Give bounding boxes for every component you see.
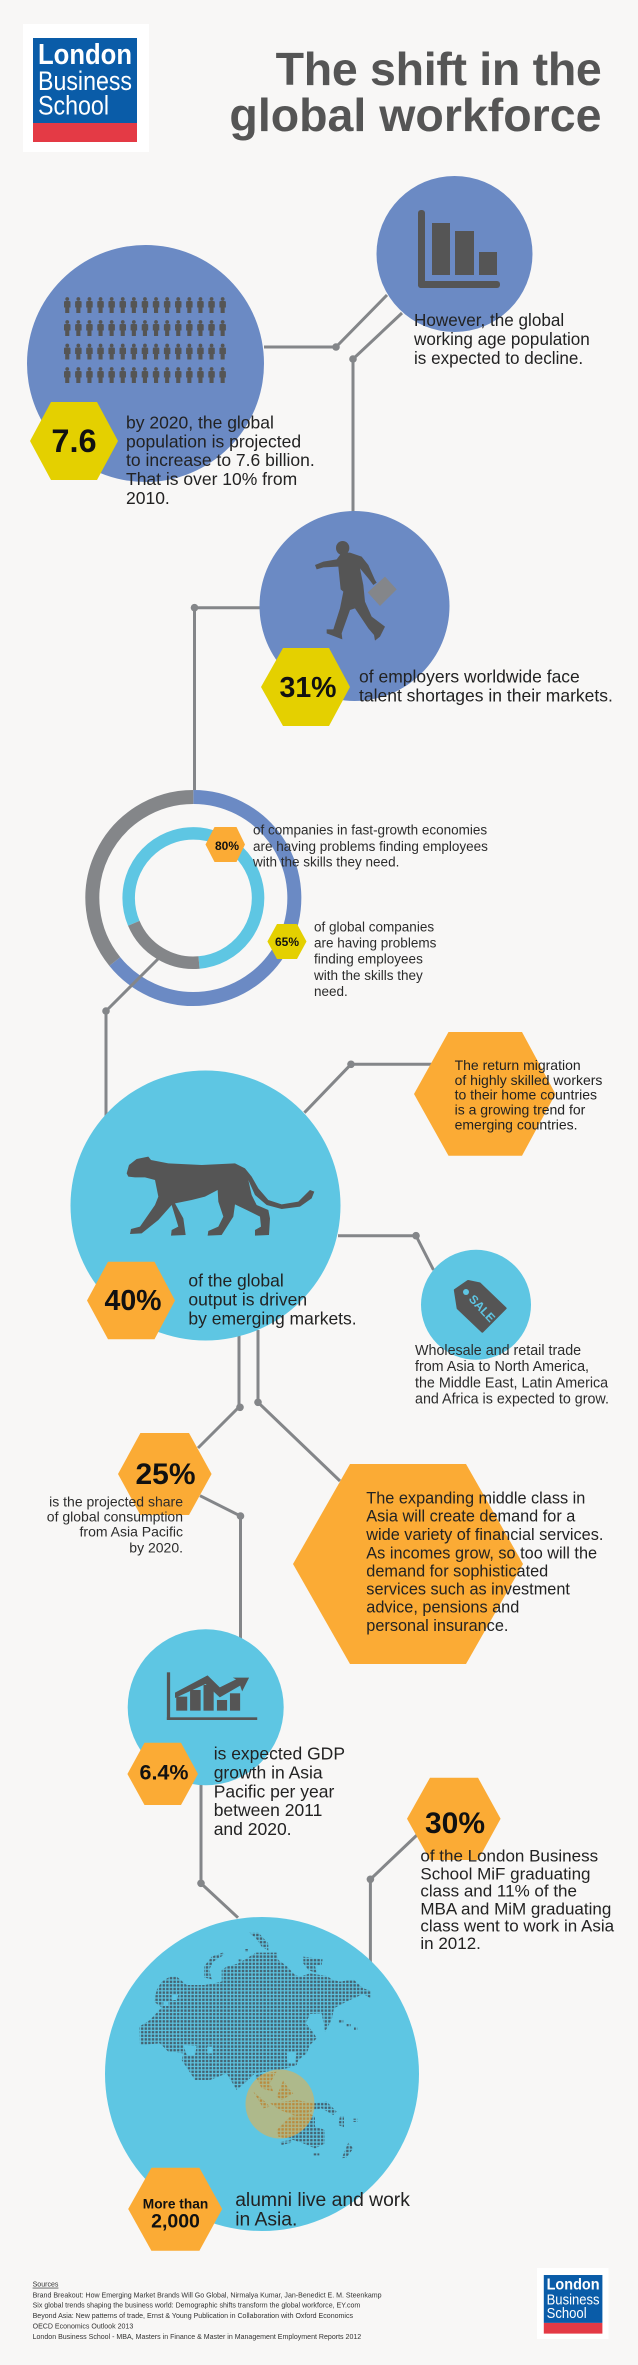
hexagon: 80%: 80% <box>215 839 239 853</box>
text: return migration: to their home countries <box>455 1086 597 1102</box>
panel: alumni in Asia map <box>105 1917 419 2251</box>
text: wholesale: and Africa is expected to grow. <box>415 1391 609 1407</box>
text: GDP: between 2011 <box>214 1800 322 1820</box>
text: global companies: with the skills they <box>313 968 423 983</box>
logo: footer <box>537 2268 608 2339</box>
logo: London Business School: London <box>38 39 132 71</box>
circle: cyan <box>105 1917 419 2231</box>
text: middle class: The expanding middle class in <box>366 1489 585 1507</box>
hexagon: 31%: 31% <box>279 672 337 704</box>
hexagon: 6.4%: 6.4% <box>139 1760 189 1784</box>
logo: footer: School <box>547 2305 587 2322</box>
panel: wholesale and retail trade <box>415 1250 609 1407</box>
icon: rows of people <box>64 297 226 383</box>
hexagon: orange large <box>293 1464 523 1664</box>
text: middle class: personal insurance. <box>366 1617 508 1635</box>
hexagon: 7.6 <box>30 402 118 480</box>
panel: MiF graduates <box>407 1778 615 1953</box>
text: decline: However, the global <box>414 311 564 330</box>
sources <box>33 2282 382 2341</box>
hexagon: 40% <box>87 1262 175 1339</box>
panel: GDP growth <box>127 1629 345 1839</box>
text: GDP: and 2020. <box>214 1819 292 1839</box>
title: global workforce <box>229 89 602 141</box>
text: return migration: is a growing trend for <box>455 1102 586 1118</box>
circle: cyan <box>128 1629 284 1785</box>
text: middle class: Asia will create demand for a <box>366 1508 576 1526</box>
text: population: That is over 10% from <box>126 469 297 489</box>
text: graduates: in 2012. <box>420 1934 481 1953</box>
text: projected share: of global consumption <box>47 1509 183 1525</box>
hexagon: 6.4% <box>127 1743 198 1805</box>
panel: return migration <box>414 1032 602 1156</box>
text: middle class: advice, pensions and <box>366 1599 519 1617</box>
panel: expanding middle class <box>293 1464 603 1664</box>
hexagon: more than 2,000: 2,000 <box>151 2210 200 2232</box>
text: global companies: need. <box>314 984 348 999</box>
panel: declining working age population <box>376 176 590 368</box>
circle: blue <box>260 511 450 701</box>
icon: declining bar chart <box>418 210 500 288</box>
hexagon: 31% <box>261 648 350 726</box>
panel: talent shortages <box>260 511 613 726</box>
connector node dots <box>102 343 420 1887</box>
hexagon: 30% <box>407 1778 501 1860</box>
text: GDP: growth in Asia <box>214 1762 323 1782</box>
text: projected share: is the projected share <box>49 1494 183 1510</box>
text: graduates: MBA and MiM graduating <box>420 1899 611 1918</box>
text: return migration: of highly skilled workers <box>455 1072 602 1088</box>
logo: footer: Business <box>547 2291 600 2308</box>
hexagon: orange <box>414 1032 556 1156</box>
hexagon: 65%: 65% <box>275 935 299 949</box>
logo: London Business School <box>23 24 149 152</box>
text: global output: of the global <box>188 1271 284 1291</box>
sources: London Business School - MBA, Masters in Finance & Master in Management Employment Reports 2012 <box>33 2334 361 2341</box>
sources: Six global trends shaping the business world: Demographic shifts transform the global workforce, EY.com <box>33 2303 360 2310</box>
icon: sale tag <box>455 1281 505 1332</box>
text: alumni: in Asia. <box>235 2210 297 2231</box>
map: dotted Asia Pacific <box>139 1932 370 2158</box>
panel: global population <box>27 245 315 508</box>
hexagon: 80% <box>206 827 245 862</box>
text: graduates: class and 11% of the <box>420 1882 577 1901</box>
text: population: by 2020, the global <box>126 412 274 432</box>
text: GDP: Pacific per year <box>214 1781 334 1801</box>
text: global companies: finding employees <box>314 952 423 967</box>
hexagon: 25%: 25% <box>135 1458 196 1491</box>
icon: walking businessman <box>315 541 397 641</box>
hexagon: 40%: 40% <box>104 1285 162 1317</box>
ring: outer 65% <box>92 797 294 999</box>
text: wholesale: the Middle East, Latin America <box>415 1375 608 1391</box>
text: population: to increase to 7.6 billion. <box>126 450 315 470</box>
sources: OECD Economics Outlook 2013 <box>33 2323 133 2330</box>
text: wholesale: Wholesale and retail trade <box>415 1343 581 1359</box>
text: population: 2010. <box>126 488 170 508</box>
icon: sale tag: SALE <box>466 1292 498 1325</box>
text: middle class: demand for sophisticated <box>366 1563 548 1581</box>
text: middle class: As incomes grow, so too will the <box>366 1544 597 1562</box>
text: projected share: by 2020. <box>129 1539 183 1555</box>
connector from ring <box>106 959 158 1011</box>
text: shortages: of employers worldwide face <box>359 667 580 687</box>
sources: Sources <box>33 2282 59 2289</box>
text: global output: output is driven <box>188 1290 307 1310</box>
text: global output: by emerging markets. <box>188 1308 357 1328</box>
panel: ring chart of companies with skills problems <box>92 797 488 1011</box>
hexagon: 30%: 30% <box>425 1807 485 1840</box>
logo: London Business School: School <box>38 90 109 120</box>
hexagon: more than 2,000: More than <box>143 2196 208 2211</box>
highlight: South East Asia circle <box>246 2070 314 2138</box>
text: middle class: services such as investment <box>366 1580 570 1598</box>
circle: cyan <box>70 1070 340 1340</box>
text: decline: working age population <box>413 330 590 349</box>
icon: cheetah <box>127 1157 314 1236</box>
circle: blue <box>27 245 264 482</box>
title: The shift in the <box>276 43 602 95</box>
panel: consumption share <box>47 1433 212 1555</box>
sources: Brand Breakout: How Emerging Market Brands Will Go Global, Nirmalya Kumar, Jan-Benedict E. M. Steenkamp <box>33 2292 382 2299</box>
logo: London Business School: Business <box>38 66 132 96</box>
ring: inner 80% <box>129 833 258 963</box>
connector lines between sections <box>106 295 434 1962</box>
panel: emerging markets <box>70 1070 357 1340</box>
circle: cyan <box>421 1250 531 1360</box>
text: graduates: of the London Business <box>420 1847 598 1866</box>
text: projected share: from Asia Pacific <box>80 1524 183 1540</box>
text: return migration: emerging countries. <box>455 1116 578 1132</box>
icon: growth chart with arrow <box>167 1672 257 1720</box>
hexagon: 65% <box>267 924 306 959</box>
sources: Beyond Asia: New patterns of trade, Ernst & Young Publication in Collaboration with Oxford Economics <box>33 2313 353 2320</box>
hexagon: 7.6: 7.6 <box>51 423 97 459</box>
logo: footer: London <box>547 2276 600 2294</box>
text: population: population is projected <box>126 432 301 452</box>
text: graduates: School MiF graduating <box>420 1864 590 1883</box>
text: alumni: alumni live and work <box>235 2190 410 2211</box>
hexagon: more than 2,000 <box>128 2168 222 2251</box>
text: fast-growth: with the skills they need. <box>252 855 399 870</box>
text: fast-growth: of companies in fast-growth economies <box>253 822 487 837</box>
hexagon: 25% <box>118 1433 212 1515</box>
text: shortages: talent shortages in their markets. <box>359 686 613 706</box>
text: GDP: is expected GDP <box>214 1743 345 1763</box>
text: global companies: are having problems <box>314 936 437 951</box>
text: global companies: of global companies <box>314 920 434 935</box>
text: decline: is expected to decline. <box>414 349 583 368</box>
text: graduates: class went to work in Asia <box>420 1917 615 1936</box>
circle: blue <box>376 176 532 332</box>
text: fast-growth: are having problems finding employees <box>253 839 488 854</box>
text: return migration: The return migration <box>455 1057 581 1073</box>
text: middle class: wide variety of financial services. <box>365 1526 603 1544</box>
text: wholesale: from Asia to North America, <box>415 1359 589 1375</box>
